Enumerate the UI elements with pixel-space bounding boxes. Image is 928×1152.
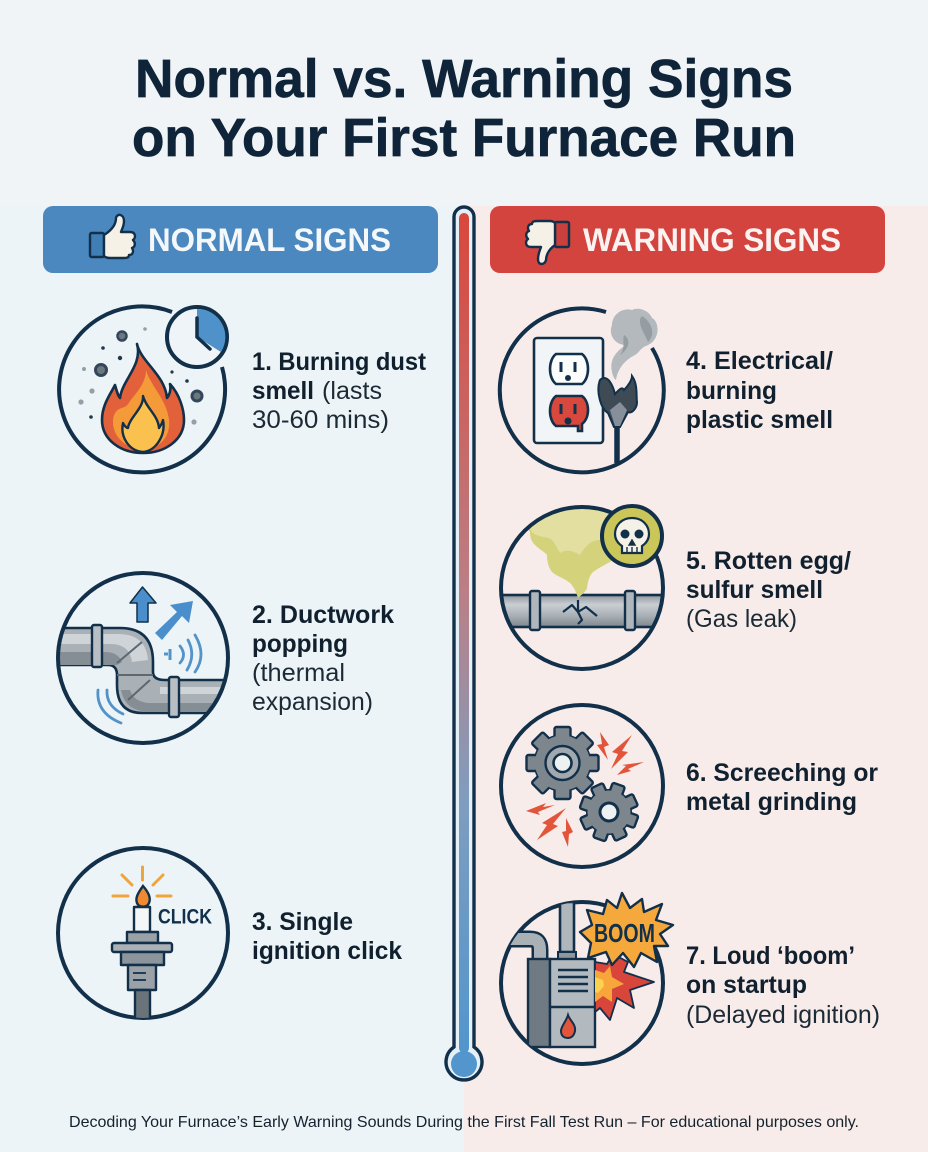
icon: igniter with spark: [58, 848, 228, 1022]
label 1: 1. Burning dust: [252, 348, 427, 376]
icon: furnace with explosion: BOOM: [594, 918, 655, 948]
item 1: burning dust: [59, 306, 427, 472]
icon: duct with arrows and sound waves: [50, 573, 235, 743]
label 5: [686, 547, 851, 633]
label 5: (Gas leak): [686, 605, 797, 633]
label 5: 5. Rotten egg/: [686, 547, 851, 575]
label 2: popping: [252, 630, 348, 658]
label 1: 30-60 mins): [252, 406, 389, 434]
panel header: normal signs: [43, 206, 438, 273]
item 5: rotten egg smell: [495, 490, 851, 669]
icon: thumbs up: [90, 215, 135, 258]
title: Normal vs. Warning Signs: [135, 49, 793, 109]
icon: furnace with explosion: [500, 893, 673, 1064]
thermometer divider: [446, 207, 482, 1080]
label 5: sulfur smell: [686, 576, 823, 604]
label 7: 7. Loud ‘boom’: [686, 942, 855, 970]
label 7: on startup: [686, 971, 807, 999]
icon: melted outlet with smoke: [500, 308, 664, 472]
label 7: [686, 942, 880, 1029]
label 6: metal grinding: [686, 788, 857, 816]
label 4: plastic smell: [686, 406, 833, 434]
label 2: 2. Ductwork: [252, 601, 394, 629]
label 1: (lasts: [322, 377, 382, 405]
label 2: (thermal: [252, 659, 345, 687]
item 4: electrical smell: [500, 308, 833, 472]
icon: igniter with spark: CLICK: [158, 906, 212, 928]
label 4: 4. Electrical/: [686, 347, 833, 375]
panel header: normal signs: NORMAL SIGNS: [148, 222, 391, 258]
label 4: [686, 347, 833, 434]
item 2: ductwork popping: [50, 573, 394, 743]
label 2: expansion): [252, 688, 373, 716]
item 3: ignition click: [58, 848, 402, 1022]
item 6: screeching or metal grinding: [501, 705, 878, 867]
label 6: 6. Screeching or: [686, 759, 878, 787]
label 2: [252, 601, 394, 716]
label 7: (Delayed ignition): [686, 1001, 880, 1029]
label 4: burning: [686, 377, 777, 405]
panel header: warning signs: WARNING SIGNS: [583, 222, 841, 258]
icon: cracked pipe with gas cloud and skull: [499, 504, 665, 671]
label 3: 3. Single: [252, 908, 353, 936]
icon: thumbs down: [526, 221, 569, 264]
label 6: [686, 759, 878, 816]
icon: gears with sparks: [501, 705, 663, 867]
panel header: warning signs: [490, 206, 885, 273]
label 3: ignition click: [252, 937, 402, 965]
label 3: [252, 908, 402, 965]
icon: flame, dust and clock: [59, 306, 227, 472]
label 1: smell: [252, 377, 314, 405]
footer note: Decoding Your Furnace’s Early Warning Sounds During the First Fall Test Run – For educational purposes only.: [69, 1114, 859, 1131]
title: on Your First Furnace Run: [132, 108, 796, 168]
item 7: loud boom on startup: [500, 893, 880, 1064]
title: [132, 49, 796, 168]
label 1: [252, 348, 427, 434]
